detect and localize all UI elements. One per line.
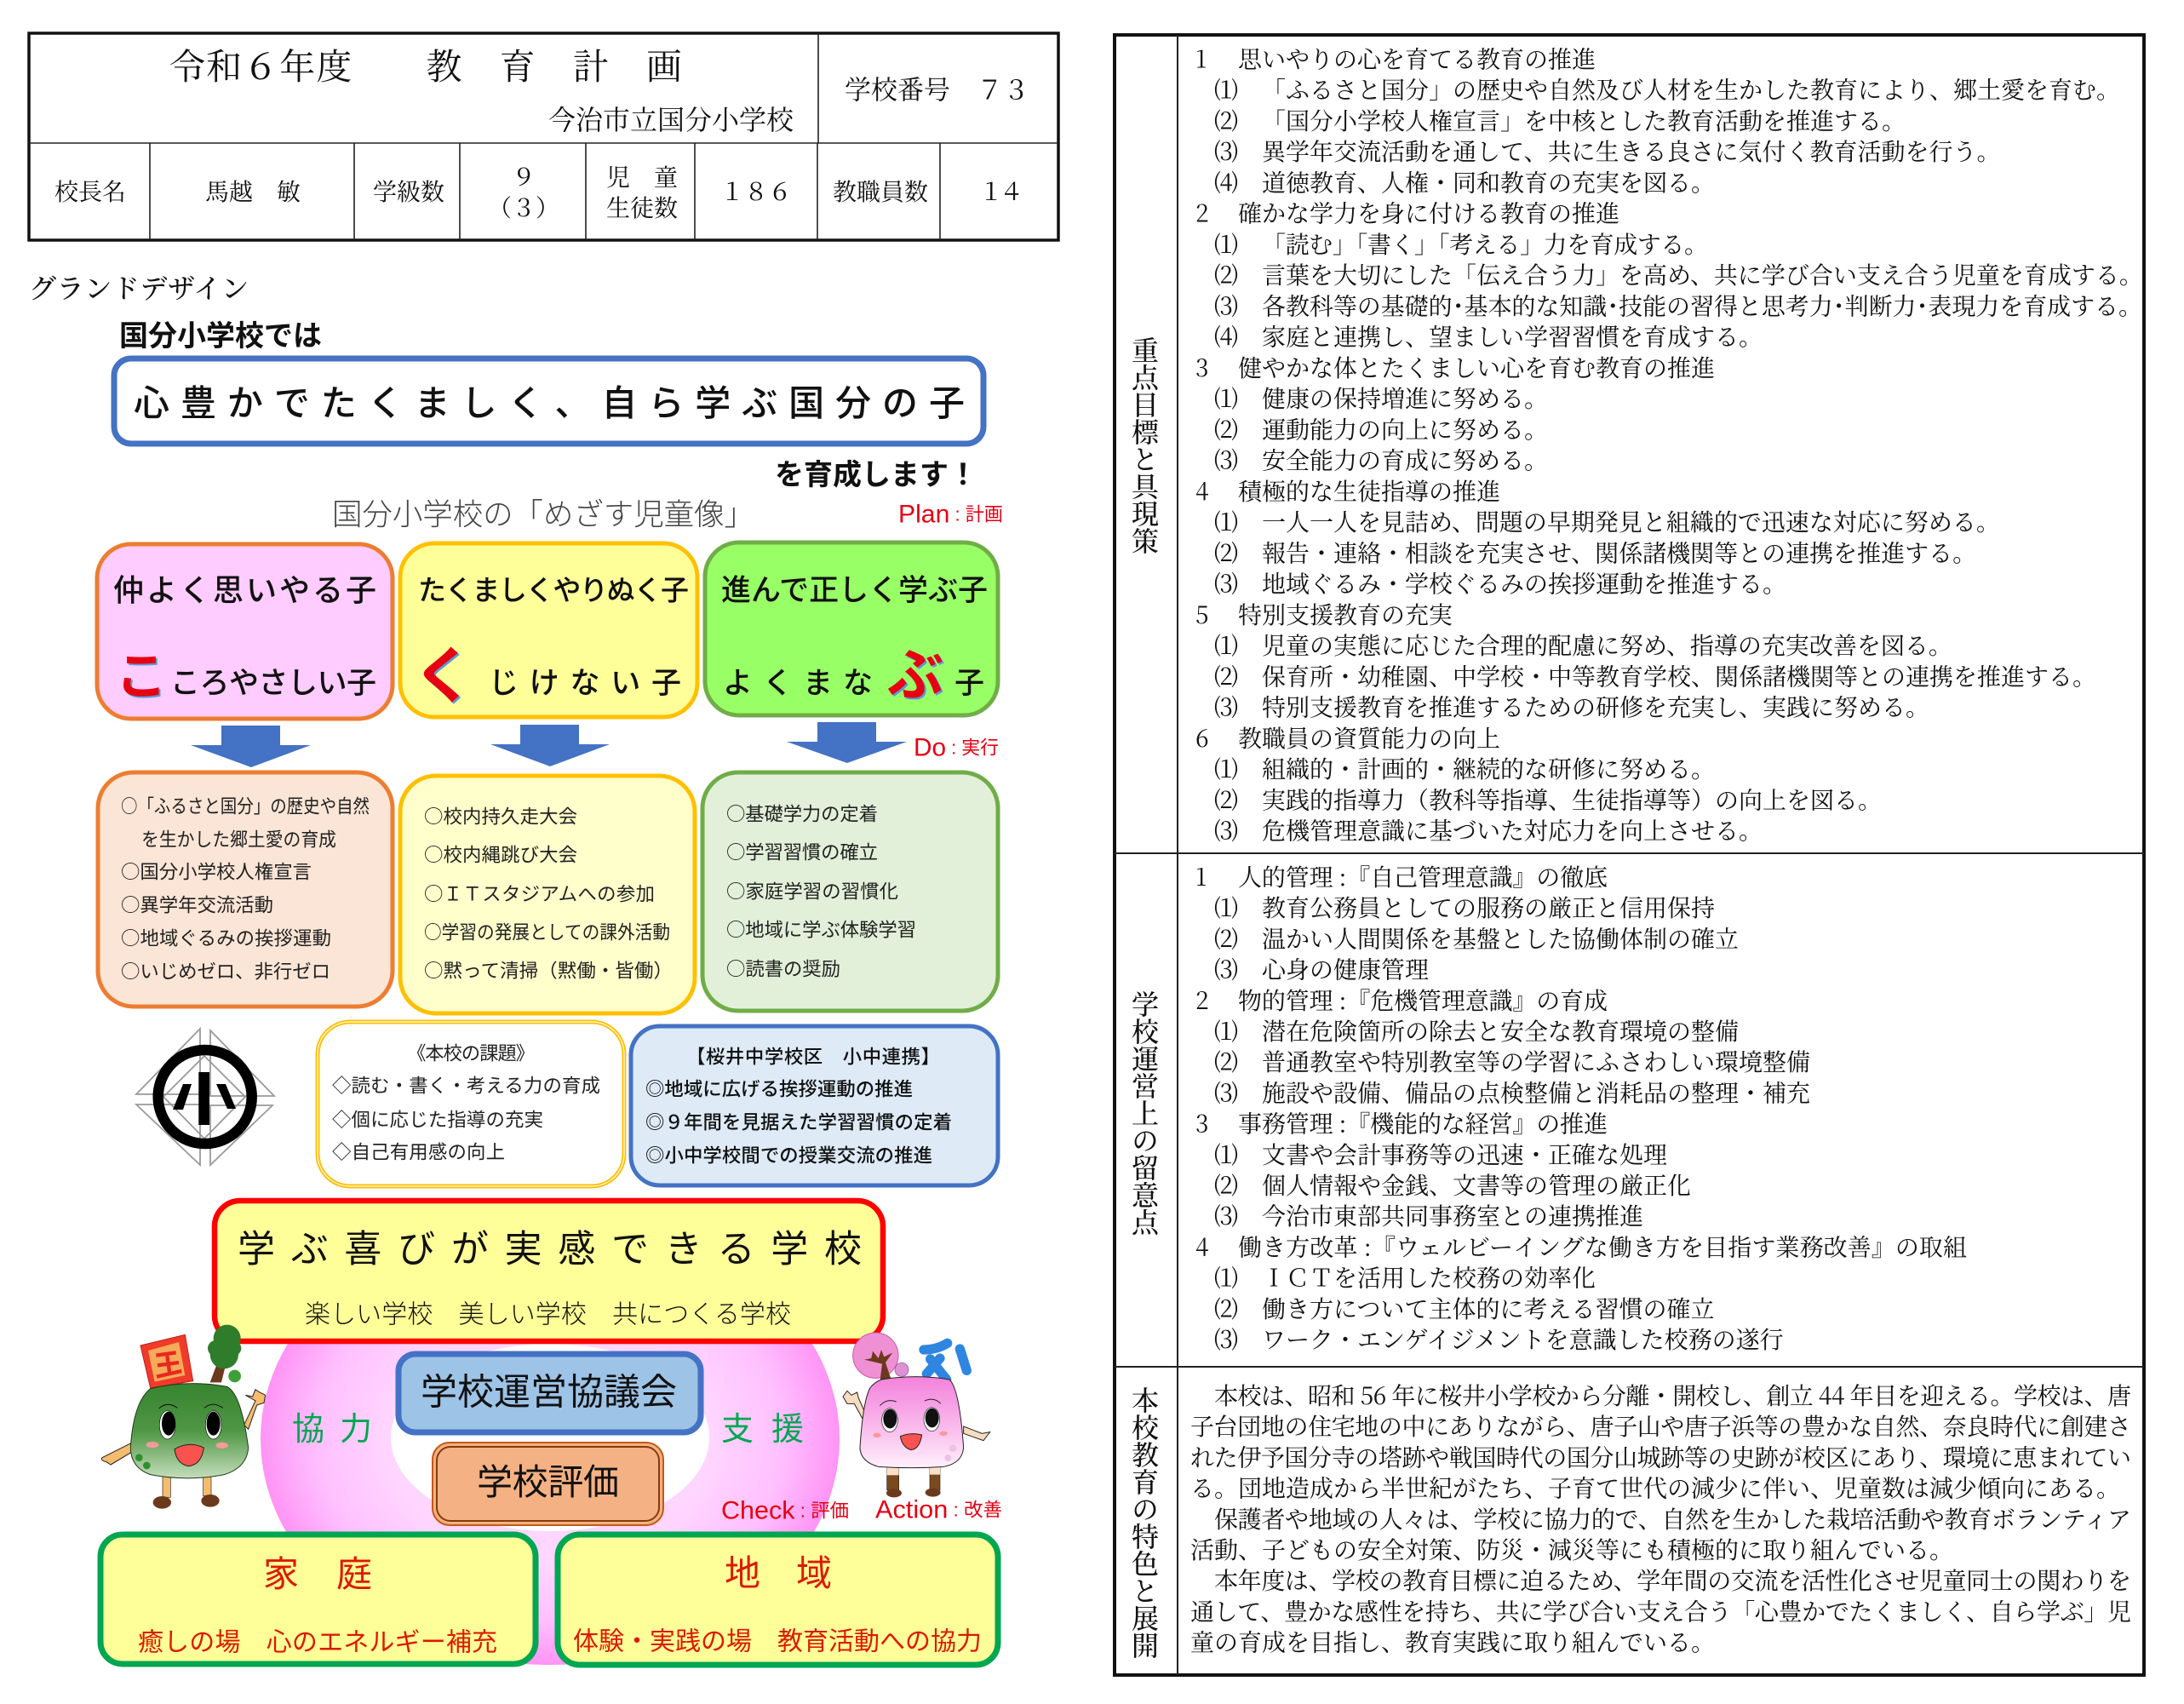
text block: management notes: 働き方改革 :『ウェルビーイングな働き方を目指す業務改善』の取組 xyxy=(1238,1229,1967,1263)
PDCA label do: Do : 実行 xyxy=(914,733,999,761)
text block: priority goals and measures: ⑴ xyxy=(1214,504,1238,538)
panel: child image green: 進んで正しく学ぶ子 xyxy=(721,566,988,610)
text block: priority goals and measures: ⑶ xyxy=(1214,134,1238,168)
arrow 2 xyxy=(490,725,610,766)
panel: child image yellow: たくましくやりぬく子 xyxy=(418,567,689,608)
vertical heading: priority goals: 重点目標と具現策 xyxy=(1126,336,1165,554)
panel: child image yellow: じけない子 xyxy=(489,659,681,703)
text block: management notes: ⑶ xyxy=(1214,1322,1238,1356)
text block: priority goals and measures: ⑴ xyxy=(1214,381,1238,415)
text block: priority goals and measures: 一人一人を見詰め、問題の早期発見と組織的で迅速な対応に努める。 xyxy=(1262,504,2000,538)
text block: priority goals and measures: ⑴ xyxy=(1214,227,1238,261)
text block: priority goals and measures: 教職員の資質能力の向上 xyxy=(1238,720,1500,754)
text block: priority goals and measures: 2 xyxy=(1195,196,1209,230)
panel: activities green: ○地域に学ぶ体験学習 xyxy=(726,915,916,942)
PDCA label check: Check : 評価 xyxy=(721,1496,849,1524)
panel: activities yellow: ○校内縄跳び大会 xyxy=(424,840,577,867)
panel: school issues: ◇個に応じた指導の充実 xyxy=(332,1105,543,1133)
text block: priority goals and measures: 健やかな体とたくましい心を育む教育の推進 xyxy=(1238,350,1715,384)
lead text end: を育成します！ xyxy=(775,451,977,493)
text block: priority goals and measures: ⑵ xyxy=(1214,535,1238,569)
lead text: 国分小学校では xyxy=(119,313,322,354)
text block: priority goals and measures: ⑷ xyxy=(1214,319,1238,353)
text block: management notes: 事務管理 :『機能的な経営』の推進 xyxy=(1238,1106,1608,1140)
panel: child image green: ぶ xyxy=(889,632,945,714)
text block: priority goals and measures: 安全能力の育成に努める。 xyxy=(1262,443,1548,477)
text block: management notes: ＩＣＴを活用した校務の効率化 xyxy=(1262,1260,1596,1294)
panel: child image pink: こ xyxy=(118,637,169,711)
text block: priority goals and measures: ⑶ xyxy=(1214,443,1238,477)
text block: priority goals and measures: 報告・連絡・相談を充実させ、関係諸機関等との連携を推進する。 xyxy=(1262,535,1976,569)
panel: school issues xyxy=(318,1022,624,1186)
text block: priority goals and measures: 1 xyxy=(1195,41,1207,75)
text block: priority goals and measures: 積極的な生徒指導の推進 xyxy=(1238,473,1500,508)
text block: priority goals and measures: 異学年交流活動を通して、共に生きる良さに気付く教育活動を行う。 xyxy=(1262,134,2000,168)
panel: child image pink xyxy=(97,544,393,719)
text block: school features: 本校は、昭和 56 年に桜井小学校から分離・開校し、創立 44 年目を迎える。学校は、唐 xyxy=(1214,1378,2131,1412)
text block: priority goals and measures: 4 xyxy=(1195,473,1209,508)
text block: priority goals and measures: 運動能力の向上に努める。 xyxy=(1262,411,1548,445)
text block: management notes: 1 xyxy=(1195,859,1207,893)
panel: activities green: ○学習習慣の確立 xyxy=(726,838,878,865)
text block: school features: 子台団地の住宅地の中にありながら、唐子山や唐子浜等の豊かな自然、奈良時代に創建さ xyxy=(1190,1409,2131,1443)
text block: management notes: 今治市東部共同事務室との連携推進 xyxy=(1262,1198,1643,1232)
panel: joyful school: 学ぶ喜びが実感できる学校 xyxy=(238,1218,862,1272)
text block: management notes: ⑴ xyxy=(1214,1260,1238,1294)
text block: priority goals and measures xyxy=(1195,41,2143,846)
text block: priority goals and measures: 言葉を大切にした「伝え合う力」を高め、共に学び合い支え合う児童を育成する。 xyxy=(1262,257,2143,291)
panel: elementary-junior high link: ◎小中学校間での授業交流の推進 xyxy=(645,1141,932,1168)
text block: priority goals and measures: ⑵ xyxy=(1214,782,1238,816)
panel: school evaluation xyxy=(433,1443,663,1525)
goal box xyxy=(114,359,983,444)
arrow 3 xyxy=(787,722,907,763)
text block: priority goals and measures: 児童の実態に応じた合理的配慮に努め、指導の充実改善を図る。 xyxy=(1262,628,1952,662)
school name: 今治市立国分小学校 xyxy=(548,99,794,138)
goal box: 心豊かでたくましく、自ら学ぶ国分の子 xyxy=(134,375,965,427)
panel: home: 癒しの場 心のエネルギー補充 xyxy=(138,1621,497,1659)
class count value xyxy=(488,159,559,224)
panel: child image yellow: く xyxy=(413,626,474,715)
right table frame xyxy=(1115,35,2144,1675)
text block: management notes: ⑶ xyxy=(1214,1198,1238,1232)
staff label: 教職員数 xyxy=(833,174,928,208)
panel: child image pink: ころやさしい子 xyxy=(170,659,376,703)
text block: management notes: ⑴ xyxy=(1214,890,1238,924)
text block: management notes: 温かい人間関係を基盤とした協働体制の確立 xyxy=(1262,921,1739,955)
icon: school emblem xyxy=(136,1029,274,1165)
text block: priority goals and measures: 健康の保持増進に努める。 xyxy=(1262,381,1548,415)
panel: elementary-junior high link: ◎９年間を見据えた学習習慣の定着 xyxy=(645,1107,952,1134)
text block: priority goals and measures: 「ふるさと国分」の歴史や自然及び人材を生かした教育により、郷土愛を育む。 xyxy=(1262,72,2120,106)
panel: activities green: ○基礎学力の定着 xyxy=(726,799,878,826)
heading: grand design: グランドデザイン xyxy=(29,267,249,307)
text block: management notes: 施設や設備、備品の点検整備と消耗品の整理・補充 xyxy=(1262,1075,1810,1109)
text block: priority goals and measures: ⑶ xyxy=(1214,566,1238,600)
text block: priority goals and measures: ⑶ xyxy=(1214,690,1238,724)
panel: activities yellow: ○学習の発展としての課外活動 xyxy=(424,918,670,945)
text block: management notes: 教育公務員としての服務の厳正と信用保持 xyxy=(1262,890,1715,924)
panel: elementary-junior high link: 【桜井中学校区 小中連携】 xyxy=(686,1042,940,1070)
text block: priority goals and measures: ⑴ xyxy=(1214,628,1238,662)
panel: school issues: ◇読む・書く・考える力の育成 xyxy=(332,1071,600,1099)
panel: activities yellow: ○黙って清掃（黙働・皆働） xyxy=(424,955,673,983)
text block: priority goals and measures: ⑶ xyxy=(1214,812,1238,846)
text block: priority goals and measures: 家庭と連携し、望ましい学習習慣を育成する。 xyxy=(1262,319,1763,353)
text block: priority goals and measures: 保育所・幼稚園、中学校・中等教育学校、関係諸機関等との連携を推進する。 xyxy=(1262,658,2096,692)
panel: activities yellow xyxy=(400,776,695,1013)
text block: priority goals and measures: 地域ぐるみ・学校ぐるみの挨拶運動を推進する。 xyxy=(1262,566,1786,600)
panel: home: 家 庭 xyxy=(263,1546,372,1598)
panel: activities yellow: ○ＩＴスタジアムへの参加 xyxy=(424,879,655,906)
staff value: １４ xyxy=(979,174,1023,208)
panel: activities green: ○家庭学習の習慣化 xyxy=(726,877,898,904)
panel: child image pink: 仲よく思いやる子 xyxy=(113,565,376,610)
text block: management notes: ⑶ xyxy=(1214,952,1238,986)
text block: management notes: 文書や会計事務等の迅速・正確な処理 xyxy=(1262,1137,1667,1171)
text block: management notes: 3 xyxy=(1195,1106,1209,1140)
text block: priority goals and measures: 3 xyxy=(1195,350,1209,384)
text block: priority goals and measures: ⑶ xyxy=(1214,288,1238,322)
panel: activities orange: ○「ふるさと国分」の歴史や自然 xyxy=(121,792,370,819)
panel: activities yellow: ○校内持久走大会 xyxy=(424,802,577,829)
panel: school issues: 《本校の課題》 xyxy=(407,1039,535,1066)
panel: school evaluation: 学校評価 xyxy=(477,1454,619,1506)
principal label: 校長名 xyxy=(54,174,126,208)
arrow 1 xyxy=(191,726,311,767)
panel: joyful school: 楽しい学校 美しい学校 共につくる学校 xyxy=(305,1293,791,1330)
panel: school council xyxy=(398,1354,701,1432)
subheading: target child image: 国分小学校の「めざす児童像」 xyxy=(332,491,754,534)
text block: priority goals and measures: ⑷ xyxy=(1214,165,1238,199)
text block: management notes: ⑵ xyxy=(1214,921,1238,955)
label: support: 支援 xyxy=(721,1403,804,1449)
text block: management notes: ⑶ xyxy=(1214,1075,1238,1109)
PDCA label action: Action : 改善 xyxy=(875,1495,1002,1523)
text block: management notes: 潜在危険箇所の除去と安全な教育環境の整備 xyxy=(1262,1013,1739,1047)
panel: child image green: よくまな xyxy=(723,659,873,703)
text block: priority goals and measures: 5 xyxy=(1195,597,1209,631)
text block: priority goals and measures: ⑴ xyxy=(1214,72,1238,106)
panel: activities orange: ○いじめゼロ、非行ゼロ xyxy=(121,957,330,984)
PDCA label plan: Plan : 計画 xyxy=(898,500,1003,528)
students label: 生徒数 xyxy=(606,190,678,224)
text block: school features: 通して、豊かな感性を持ち、共に学び合い支え合う「心豊かでたくましく、自ら学ぶ」児 xyxy=(1190,1593,2131,1627)
text block: priority goals and measures: ⑵ xyxy=(1214,103,1238,137)
school number: 学校番号 ７３ xyxy=(845,68,1029,107)
text block: priority goals and measures: ⑵ xyxy=(1214,411,1238,445)
text block: school features: 活動、子どもの安全対策、防災・減災等にも積極的に取り組んでいる。 xyxy=(1190,1532,1953,1566)
principal name: 馬越 敏 xyxy=(205,174,301,208)
text block: priority goals and measures: 「読む」「書く」「考える」力を育成する。 xyxy=(1262,227,1708,261)
text block: priority goals and measures: 実践的指導力（教科等指導、生徒指導等）の向上を図る。 xyxy=(1262,782,1882,816)
students value: １８６ xyxy=(720,174,792,208)
text block: priority goals and measures: 危機管理意識に基づいた対応力を向上させる。 xyxy=(1262,812,1763,846)
text block: priority goals and measures: 「国分小学校人権宣言」を中核とした教育活動を推進する。 xyxy=(1262,103,1906,137)
label: cooperation: 協力 xyxy=(292,1403,372,1449)
text block: priority goals and measures: ⑴ xyxy=(1214,751,1238,785)
panel: activities orange xyxy=(98,772,393,1007)
panel: elementary-junior high link xyxy=(631,1026,998,1185)
text block: priority goals and measures: 特別支援教育を推進するための研修を充実し、実践に努める。 xyxy=(1262,690,1929,724)
panel: school issues: ◇自己有用感の向上 xyxy=(332,1138,505,1165)
panel: activities orange: ○異学年交流活動 xyxy=(121,891,273,918)
panel: activities green: ○読書の奨励 xyxy=(726,954,840,981)
panel: child image pink: こ xyxy=(116,635,167,709)
panel: child image yellow: く xyxy=(415,628,476,717)
icon: pink mascot xyxy=(843,1333,990,1497)
panel: community: 地 域 xyxy=(725,1545,832,1597)
text block: priority goals and measures: 思いやりの心を育てる教育の推進 xyxy=(1238,41,1596,75)
text block: management notes: 2 xyxy=(1195,983,1209,1017)
text block: school features: 本年度は、学校の教育目標に迫るため、学年間の交流を活性化させ児童同士の関わりを xyxy=(1214,1563,2131,1597)
panel: child image green: ぶ xyxy=(887,630,943,712)
vertical heading: school features: 本校教育の特色と展開 xyxy=(1126,1386,1165,1659)
panel: activities orange: ○地域ぐるみの挨拶運動 xyxy=(121,923,331,950)
text block: management notes: ⑵ xyxy=(1214,1291,1238,1325)
text block: priority goals and measures: 組織的・計画的・継続的な研修に努める。 xyxy=(1262,751,1715,785)
text block: management notes: 物的管理 :『危機管理意識』の育成 xyxy=(1238,983,1608,1017)
text block: priority goals and measures: 特別支援教育の充実 xyxy=(1238,597,1453,631)
class count value: （３） xyxy=(488,190,559,224)
students label xyxy=(606,159,678,224)
text block: management notes: 人的管理 :『自己管理意識』の徹底 xyxy=(1238,859,1608,893)
panel: activities green xyxy=(702,772,998,1011)
text block: management notes: 4 xyxy=(1195,1229,1209,1263)
text block: management notes: 働き方について主体的に考える習慣の確立 xyxy=(1262,1291,1714,1325)
pink ring xyxy=(261,1213,840,1665)
text block: management notes: ワーク・エンゲイジメントを意識した校務の遂行 xyxy=(1262,1322,1784,1356)
document title: 令和６年度 教 育 計 画 xyxy=(169,39,682,90)
panel: activities orange: を生かした郷土愛の育成 xyxy=(141,824,336,852)
text block: management notes: 個人情報や金銭、文書等の管理の厳正化 xyxy=(1262,1168,1691,1202)
class count value: ９ xyxy=(512,159,536,193)
panel: child image green: 子 xyxy=(954,659,984,703)
text block: management notes xyxy=(1195,859,1967,1356)
icon: green mascot xyxy=(101,1325,266,1509)
panel: child image green xyxy=(705,542,998,715)
text block: priority goals and measures: 6 xyxy=(1195,720,1209,754)
text block: priority goals and measures: 道徳教育、人権・同和教育の充実を図る。 xyxy=(1262,165,1715,199)
panel: child image yellow xyxy=(400,543,697,717)
panel: community: 体験・実践の場 教育活動への協力 xyxy=(573,1620,982,1657)
panel: home xyxy=(100,1535,536,1664)
text block: management notes: ⑴ xyxy=(1214,1013,1238,1047)
text block: school features: 保護者や地域の人々は、学校に協力的で、自然を生かした栽培活動や教育ボランティア xyxy=(1214,1501,2131,1535)
text block: management notes: ⑵ xyxy=(1214,1168,1238,1202)
text block: school features: る。団地造成から半世紀がたち、子育て世代の減少に伴い、児童数は減少傾向にある。 xyxy=(1190,1471,2120,1505)
text block: priority goals and measures: 確かな学力を身に付ける教育の推進 xyxy=(1238,196,1619,230)
text block: management notes: ⑵ xyxy=(1214,1044,1238,1078)
text block: management notes: ⑴ xyxy=(1214,1137,1238,1171)
panel: activities orange: ○国分小学校人権宣言 xyxy=(121,857,312,884)
panel: community xyxy=(558,1535,998,1665)
panel: elementary-junior high link: ◎地域に広げる挨拶運動の推進 xyxy=(645,1075,913,1102)
text block: management notes: 普通教室や特別教室等の学習にふさわしい環境整備 xyxy=(1262,1044,1810,1078)
text block: priority goals and measures: 各教科等の基礎的･基本的な知識･技能の習得と思考力･判断力･表現力を育成する。 xyxy=(1262,288,2142,322)
class count label: 学級数 xyxy=(373,174,444,208)
vertical heading: management notes: 学校運営上の留意点 xyxy=(1126,990,1165,1236)
text block: school features: れた伊予国分寺の塔跡や戦国時代の国分山城跡等の史跡が校区にあり、環境に恵まれてい xyxy=(1190,1439,2131,1473)
text block: management notes: 心身の健康管理 xyxy=(1262,952,1429,986)
text block: priority goals and measures: ⑵ xyxy=(1214,257,1238,291)
students label: 児 童 xyxy=(606,159,678,193)
text block: school features: 童の育成を目指し、教育実践に取り組んでいる。 xyxy=(1190,1625,1715,1659)
text block: school features xyxy=(1190,1378,2131,1659)
text block: priority goals and measures: ⑵ xyxy=(1214,658,1238,692)
header table xyxy=(29,33,1058,240)
panel: joyful school xyxy=(215,1201,883,1341)
panel: school council: 学校運営協議会 xyxy=(421,1363,677,1415)
